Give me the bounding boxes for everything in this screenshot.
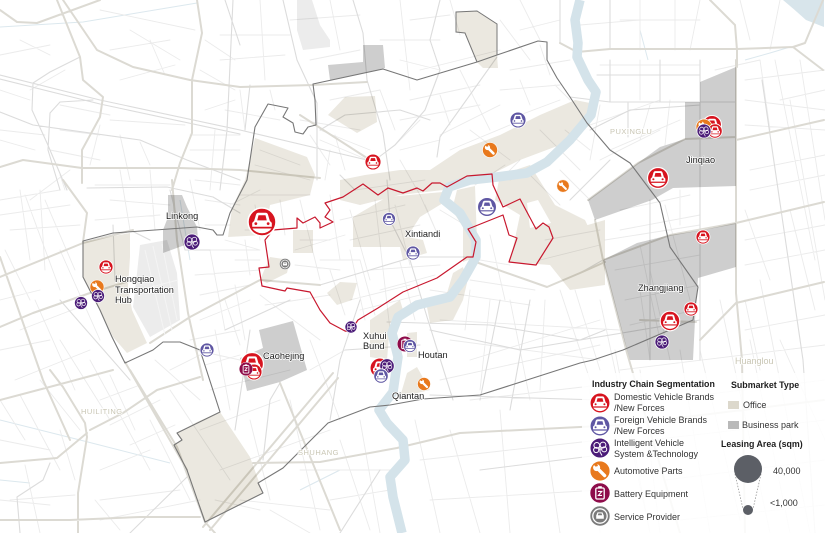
marker: intelligent vehicle Hongqiao west <box>74 296 88 310</box>
north business park <box>328 45 385 80</box>
place labels: Xuhui <box>363 331 386 341</box>
marker: domestic vehicle Zhangjiang south <box>660 311 680 331</box>
legend: industry chain segmentation: /New Forces <box>614 426 665 436</box>
legend: industry chain segmentation: System &Technology <box>614 449 699 459</box>
place labels: Xintiandi <box>405 229 440 239</box>
markers: service provider <box>280 258 290 270</box>
marker: automotive parts Qiantan <box>418 378 430 390</box>
marker: intelligent vehicle Xuhui <box>345 321 357 333</box>
northern exclave boundary <box>456 11 497 62</box>
place labels: Jinqiao <box>686 155 715 165</box>
place labels: Bund <box>363 341 384 351</box>
place labels: Hub <box>115 295 132 305</box>
office submarkets <box>83 11 605 522</box>
marker: domestic vehicle Jinqiao <box>648 168 668 188</box>
marker: domestic vehicle Zhongshan <box>248 208 276 236</box>
legend: submarket type <box>728 380 799 430</box>
marker: intelligent vehicle Hongqiao <box>92 290 104 302</box>
place labels: Houtan <box>418 350 448 360</box>
legend: submarket type: Submarket Type <box>731 380 799 390</box>
legend: industry chain segmentation: Intelligent Vehicle <box>614 438 684 448</box>
marker cluster: Houtan <box>397 336 416 352</box>
block inside Lujiazui <box>527 200 551 228</box>
legend: submarket type: Office <box>743 400 766 410</box>
legend: industry chain segmentation: Battery Equipment <box>614 489 689 499</box>
place labels: Caohejing <box>263 351 304 361</box>
marker: domestic vehicle Zhangjiang east <box>684 302 698 316</box>
district labels: HUILITING <box>81 407 123 416</box>
marker: automotive parts Hongqiao <box>90 280 104 294</box>
marker: domestic vehicle Hongqiao <box>99 260 113 274</box>
legend: industry chain segmentation: /New Forces <box>614 403 665 413</box>
marker: foreign vehicle Xintiandi <box>406 246 420 260</box>
marker cluster: Jinqiao <box>696 116 722 138</box>
district labels <box>81 127 774 457</box>
legend: leasing area: <1,000 <box>770 498 798 508</box>
place labels: Qiantan <box>392 391 424 401</box>
place labels: Hongqiao <box>115 274 154 284</box>
district labels: PUXINGLU <box>610 127 652 136</box>
district labels: Huanglou <box>735 356 774 366</box>
legend: leasing area <box>721 439 803 515</box>
Linkong business park <box>163 195 198 253</box>
Jinqiao business park <box>588 67 736 220</box>
Huangpu river <box>379 0 596 533</box>
marker: automotive parts north <box>482 142 498 158</box>
marker: domestic vehicle north <box>365 154 381 170</box>
outer ring boundary <box>83 41 698 522</box>
Zhangjiang business park <box>603 223 736 360</box>
legend: industry chain segmentation <box>590 379 715 526</box>
place labels: Linkong <box>166 211 198 221</box>
Caohejing business park <box>240 321 307 391</box>
marker cluster: Caohejing <box>239 352 264 380</box>
legend: industry chain segmentation: Domestic Vehicle Brands <box>614 392 715 402</box>
place labels: Transportation <box>115 285 174 295</box>
place labels <box>115 155 715 401</box>
business parks <box>163 45 736 391</box>
place labels: Zhangjiang <box>638 283 683 293</box>
inner ring red boundary <box>259 174 553 332</box>
right margin strip <box>825 0 833 533</box>
marker: foreign vehicle Bund <box>478 198 496 216</box>
marker: intelligent vehicle Zhangjiang <box>655 335 669 349</box>
marker: foreign vehicle Jing'an <box>382 212 396 226</box>
legend: submarket type: Business park <box>742 420 799 430</box>
legend: leasing area: 40,000 <box>773 466 801 476</box>
legend: industry chain segmentation: Foreign Vehicle Brands <box>614 415 708 425</box>
district labels: SHUHANG <box>298 448 339 457</box>
marker: foreign vehicle north <box>510 112 526 128</box>
legend: industry chain segmentation: Service Provider <box>614 512 680 522</box>
legend: industry chain segmentation: Industry Chain Segmentation <box>592 379 715 389</box>
marker: domestic vehicle Zhangjiang north <box>696 230 710 244</box>
legend: leasing area: Leasing Area (sqm) <box>721 439 803 449</box>
legend panel <box>582 373 825 533</box>
marker: automotive parts Lujiazui <box>557 180 569 192</box>
airports <box>133 0 330 337</box>
marker: intelligent vehicle Linkong <box>184 234 200 250</box>
marker: foreign vehicle west <box>200 343 214 357</box>
marker cluster: Xuhui <box>370 358 394 383</box>
legend: industry chain segmentation: Automotive Parts <box>614 466 683 476</box>
